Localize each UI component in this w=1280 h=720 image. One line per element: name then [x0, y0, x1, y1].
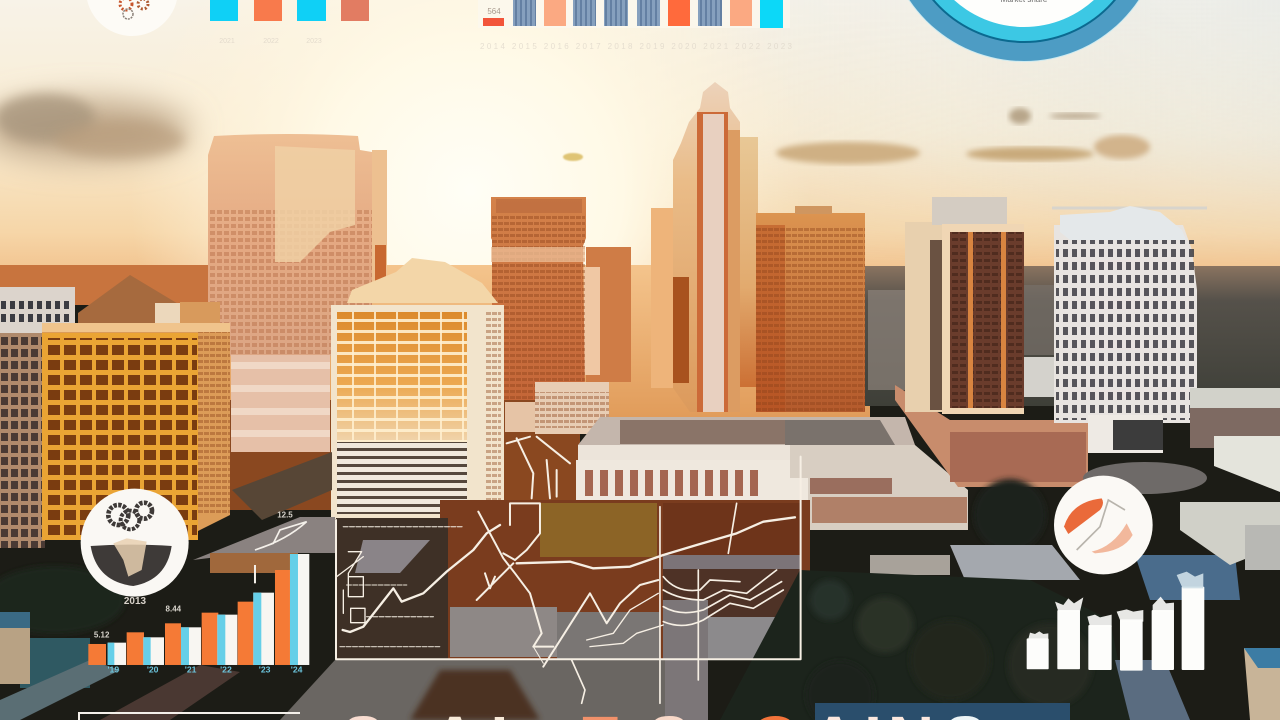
title, clipped at bottom edge	[342, 703, 986, 720]
left bar chart	[88, 510, 309, 675]
axis labels: '22	[220, 665, 232, 675]
building: central low hall with columns	[576, 417, 968, 530]
wind-turbine sketch lines	[507, 437, 570, 498]
building: left corner block	[0, 275, 220, 548]
faint table rows	[340, 527, 463, 647]
top-centre bar chart	[478, 0, 793, 51]
ground: trees, roads and water	[0, 462, 1240, 720]
small boxes on the left	[337, 552, 365, 623]
vertical guide lines	[572, 503, 737, 703]
building: rust tower with crown	[491, 197, 631, 434]
axis labels: '21	[185, 665, 197, 675]
building: yellow apartment block	[42, 323, 230, 540]
central line chart	[336, 437, 801, 703]
chart axis labels: 2021	[219, 38, 235, 45]
axis labels: '20	[147, 665, 159, 675]
axis labels: '24	[291, 665, 303, 675]
building: white curved tower	[1052, 206, 1207, 453]
axis labels: '19	[107, 665, 119, 675]
background: sunset sky	[0, 0, 1280, 290]
badge caption: 2013	[124, 596, 147, 607]
mountain peak line	[543, 580, 658, 667]
right bar chart	[1027, 572, 1204, 671]
main trend line left	[343, 525, 500, 632]
axis labels	[107, 665, 303, 675]
axis labels: '23	[259, 665, 271, 675]
value labels: 12.5	[277, 510, 293, 519]
buildings: low right-hand blocks	[0, 388, 1280, 720]
top-left icon badge	[86, 0, 178, 36]
lower series lines	[587, 593, 658, 640]
top-left bar chart: 2022	[263, 38, 279, 45]
tangled upper connector	[477, 503, 553, 647]
top-right circular gauge	[885, 0, 1163, 62]
horizon and distant city	[0, 265, 1280, 720]
building: white orange-window block	[331, 258, 504, 519]
spiky value markers	[1028, 572, 1203, 640]
clouds	[0, 94, 1150, 164]
value labels	[94, 510, 293, 639]
top-left bar chart: 2023	[306, 38, 322, 45]
value label: 564	[487, 7, 501, 16]
ground: central grass and plaza	[193, 452, 810, 720]
value labels: 5.12	[94, 630, 110, 639]
line at bottom-left	[79, 713, 300, 720]
value labels: 8.44	[166, 605, 182, 614]
right icon badge	[1054, 476, 1153, 574]
chart frame	[336, 457, 801, 659]
top-left bar chart	[210, 0, 369, 45]
main trend line right	[517, 517, 795, 568]
building: large glass tower	[208, 134, 387, 452]
building: tall spire tower	[651, 82, 758, 412]
building: orange office block	[756, 206, 865, 412]
axis labels: 2014 2015 2016 2017 2018 2019 2020 2021 2022 2023	[480, 42, 793, 51]
building: brown tower	[895, 197, 1088, 487]
left icon badge	[81, 489, 189, 607]
